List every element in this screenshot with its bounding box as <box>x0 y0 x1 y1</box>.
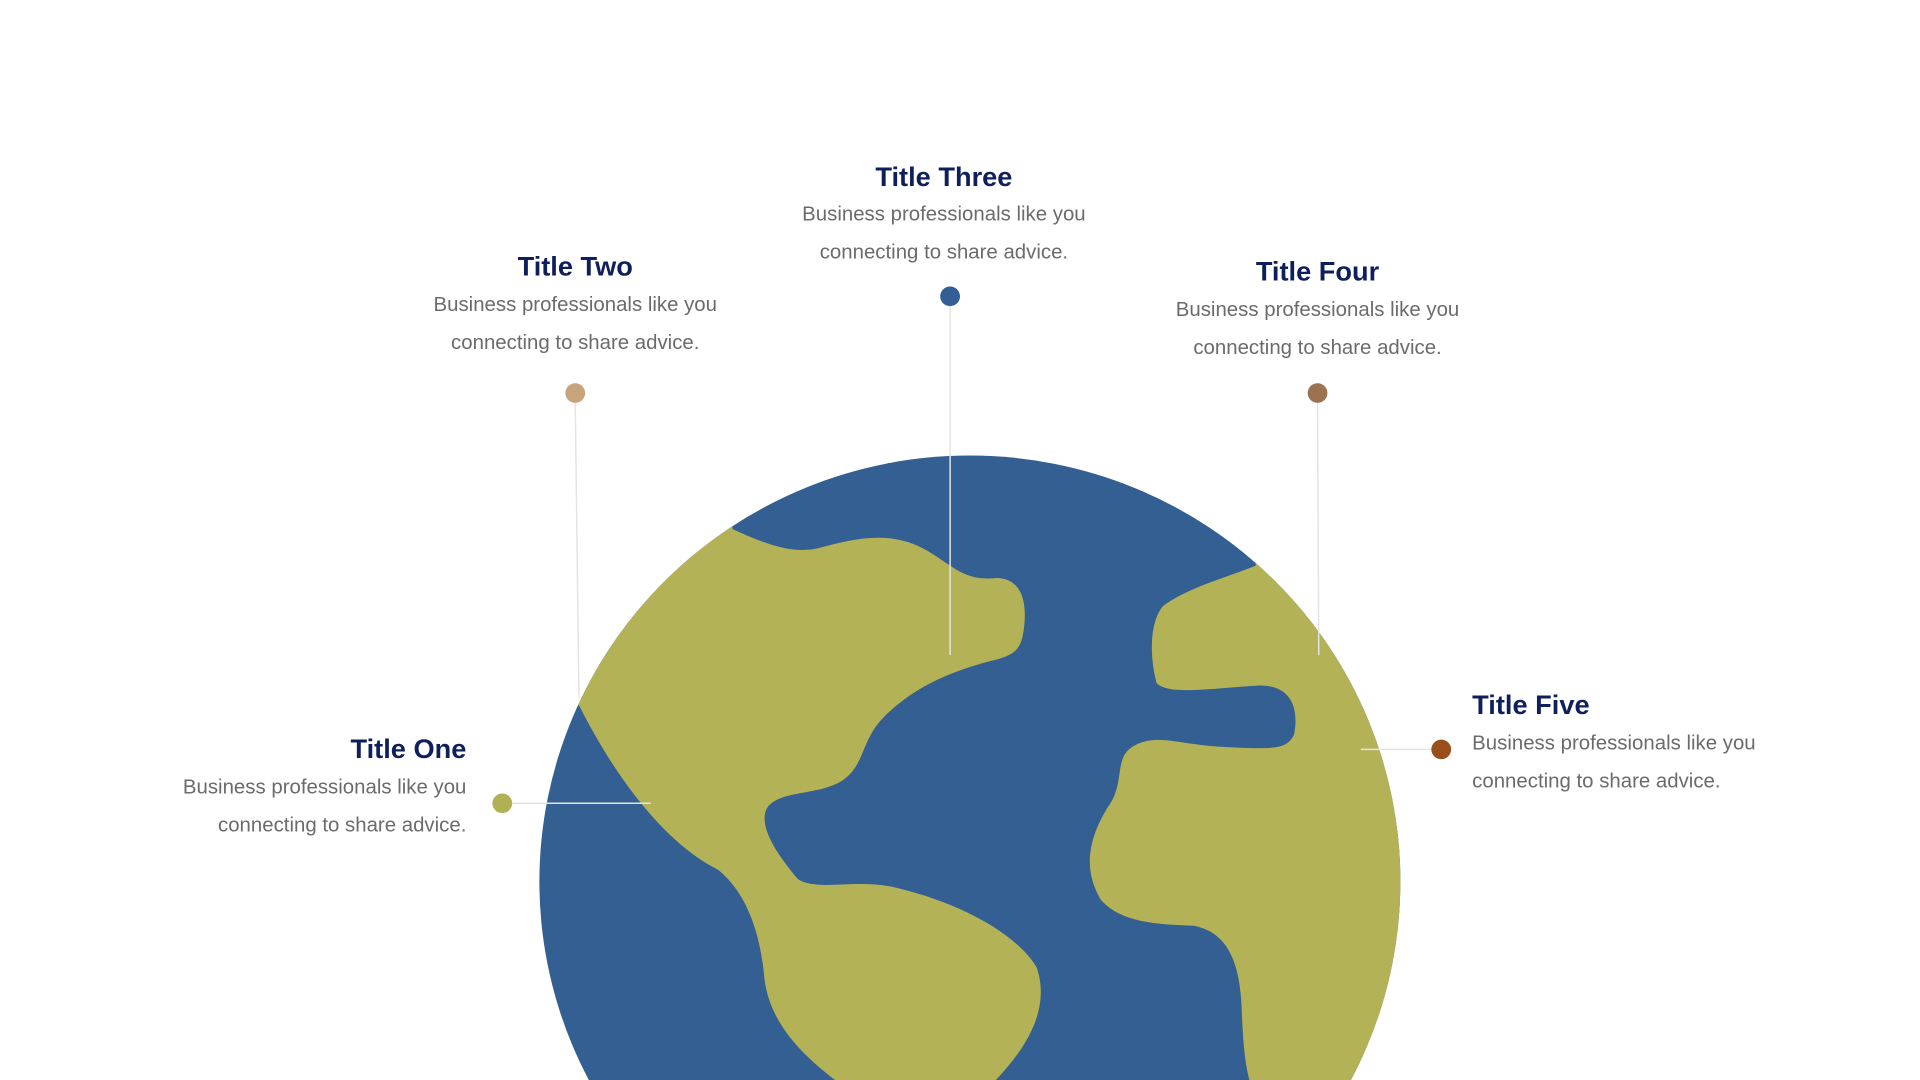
item: Title Two: connecting to share advice. <box>451 332 699 354</box>
item: Title Four: Title Four <box>1256 256 1380 286</box>
item: Title Four: connecting to share advice. <box>1193 337 1442 359</box>
item: Title Two: Business professionals like you <box>434 294 717 316</box>
item: Title One: connecting to share advice. <box>218 815 466 836</box>
item: Title Three: Business professionals like you <box>802 203 1086 225</box>
globe <box>539 456 1400 1080</box>
item: Title Five: Title Five <box>1472 689 1590 720</box>
land: right continent <box>1090 563 1400 1080</box>
item: Title Three <box>802 161 1086 306</box>
item: Title Two: Title Two <box>518 251 633 281</box>
item: Title Five <box>1431 689 1756 792</box>
item: Title Three: Title Three <box>875 161 1012 192</box>
item: Title Four: Business professionals like you <box>1176 299 1459 321</box>
item: Title Five: Business professionals like you <box>1472 732 1756 754</box>
land: left continent <box>578 526 1041 1080</box>
item: Title Two <box>434 251 717 403</box>
connector lines <box>512 306 1431 803</box>
item: Title One: Title One <box>351 733 466 764</box>
item: Title Four <box>1176 256 1459 403</box>
item: Title One: Business professionals like you <box>183 777 466 798</box>
item: Title One <box>183 733 512 836</box>
item: Title Three: connecting to share advice. <box>820 241 1068 263</box>
item: Title Five: connecting to share advice. <box>1472 770 1721 792</box>
